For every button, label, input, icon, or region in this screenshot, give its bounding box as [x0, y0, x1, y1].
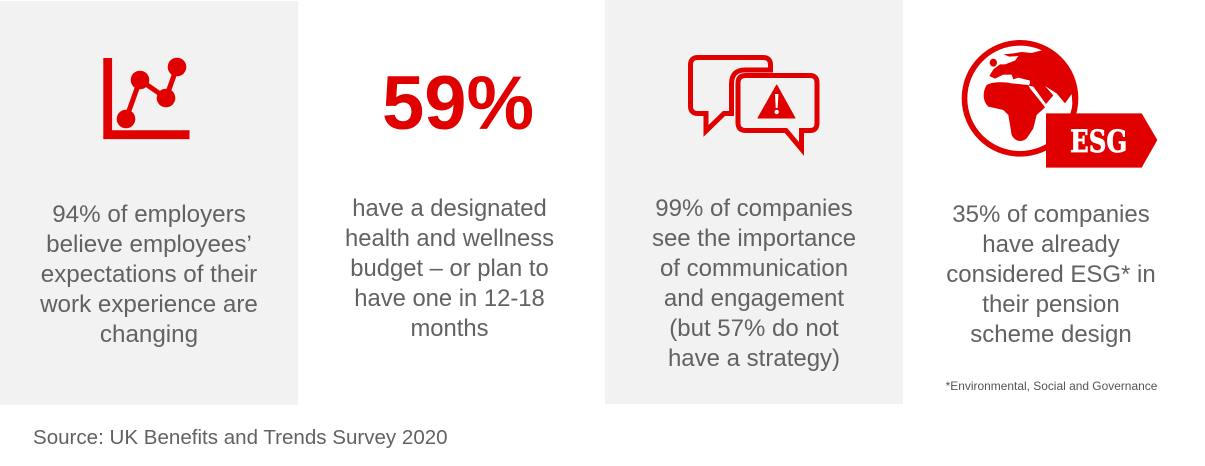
text: 35% of companies: 35% of companies [952, 201, 1150, 228]
icon: speech bubbles with warning [688, 55, 820, 156]
text: 99% of companies: and engagement [664, 285, 844, 312]
icon: line chart [103, 58, 190, 140]
text: 99% of companies: 99% of companies [655, 195, 853, 222]
text: 94% of employers: expectations of their [41, 261, 257, 288]
text: 99% of companies [652, 195, 856, 372]
panel: ESG [946, 40, 1158, 393]
text: designated budget [345, 195, 554, 342]
statistic: 59%: 59% [382, 61, 534, 146]
text: 94% of employers: work experience are [40, 291, 258, 318]
text: 94% of employers: believe employees’ [46, 231, 252, 258]
panel: wellness budget [345, 61, 554, 342]
text: 99% of companies: have a strategy) [668, 345, 840, 372]
text: 99% of companies: of communication [660, 255, 848, 282]
text: 94% of employers [40, 201, 258, 348]
text: designated budget: have one in 12-18 [354, 285, 545, 312]
text: 99% of companies: (but 57% do not [669, 315, 839, 342]
text: designated budget: budget – or plan to [350, 255, 549, 282]
text: 35% of companies [946, 201, 1156, 348]
icon: globe with ESG tag: ESG [1070, 124, 1127, 160]
text: designated budget: health and wellness [345, 225, 554, 252]
footnote: *Environmental, Social and Governance [946, 379, 1157, 393]
text: 99% of companies: see the importance [652, 225, 856, 252]
text: designated budget: have a designated [352, 195, 547, 222]
panel: work expectations [0, 1, 298, 405]
icon: globe with ESG tag [962, 40, 1158, 168]
text: 94% of employers: 94% of employers [52, 201, 246, 228]
text: 35% of companies: their pension [982, 291, 1120, 318]
text: 35% of companies: considered ESG* in [946, 261, 1156, 288]
text: 94% of employers: changing [100, 321, 198, 348]
text: 35% of companies: have already [982, 231, 1120, 258]
panel: communication [605, 0, 903, 404]
text: 35% of companies: scheme design [970, 321, 1132, 348]
source line: Source: UK Benefits and Trends Survey 2020 [33, 426, 448, 449]
text: designated budget: months [410, 315, 489, 342]
